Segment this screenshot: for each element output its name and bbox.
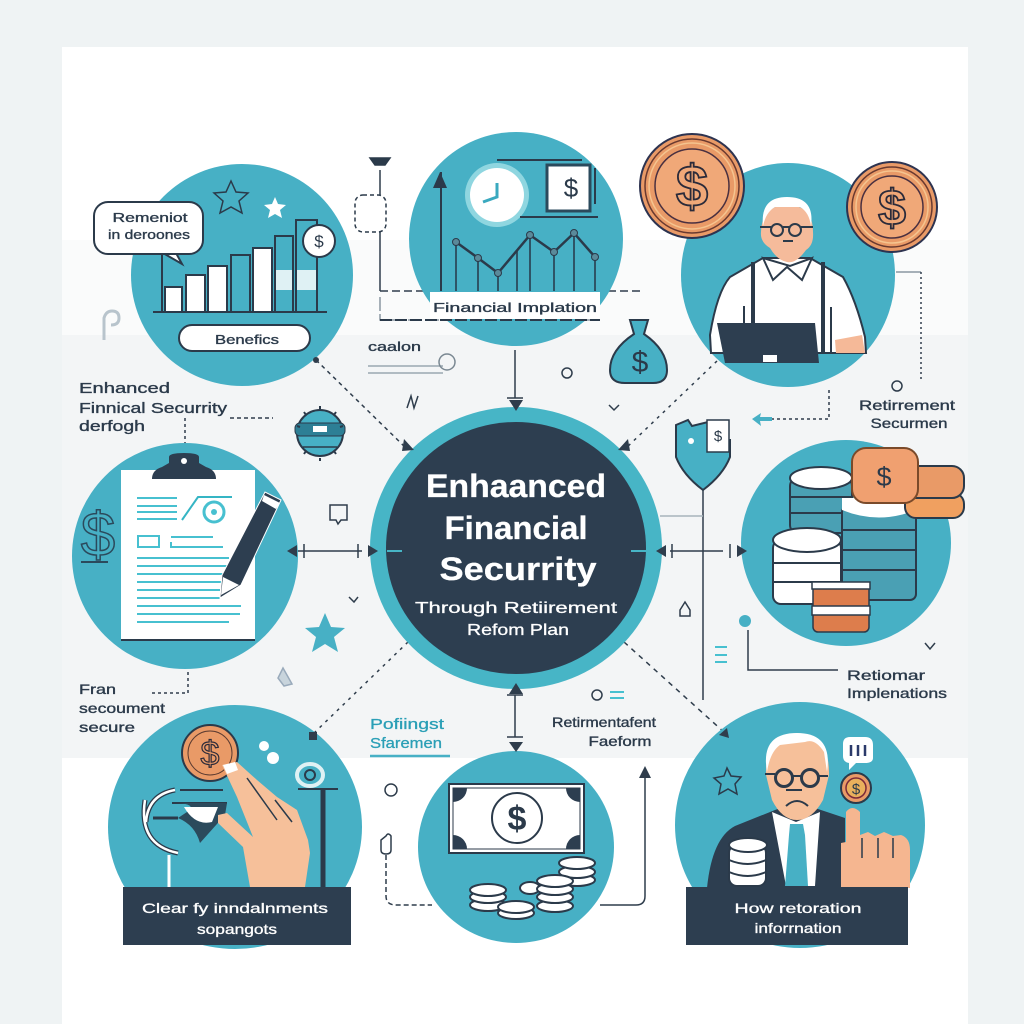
panel: benefits <box>94 164 353 386</box>
coin: $ <box>314 232 324 251</box>
speech bubble: in deroones <box>108 227 191 242</box>
label: robingst statement: Sfaremen <box>370 735 442 752</box>
label: caalon <box>368 339 455 373</box>
icon: shield: $ <box>714 428 723 445</box>
label: fran secure: Fran <box>79 681 116 697</box>
icon: large coin left: $ <box>676 154 708 219</box>
small coin <box>841 773 871 803</box>
centre stack <box>842 498 916 600</box>
icon: money bag <box>610 320 667 383</box>
label: retirement secormen <box>859 397 955 431</box>
lamp mark <box>355 158 390 232</box>
caption bar: How retoration <box>734 900 862 916</box>
icon: pin <box>739 615 751 627</box>
caption bar <box>686 887 908 945</box>
panel: coin stacks <box>741 440 964 646</box>
back stack <box>790 467 852 533</box>
icon: large coin right <box>847 162 937 252</box>
icon: globe <box>295 406 345 461</box>
caption bar <box>123 887 351 945</box>
connectors <box>150 170 921 905</box>
icon: large coin left <box>640 134 744 238</box>
icon: star <box>305 613 345 652</box>
label: enhanced financial security: Finnical Securrity <box>79 400 228 417</box>
panel: clipboard: $ <box>81 501 115 570</box>
caption bar: inforrnation <box>754 920 842 936</box>
hub subtitle: Refom Plan <box>467 622 569 639</box>
hub title: Securrity <box>440 551 597 587</box>
speech bubble <box>94 202 203 264</box>
arrowheads <box>287 357 747 778</box>
label: enhanced financial security <box>79 380 228 435</box>
orange coins <box>852 448 964 518</box>
label: enhanced financial security: derfogh <box>79 418 145 435</box>
white stack <box>773 528 841 604</box>
hub title: Financial <box>444 510 588 546</box>
caption bar: Clear fy inndalnments <box>142 900 328 916</box>
caption <box>380 292 600 320</box>
dollar frame: $ <box>564 173 579 203</box>
hub subtitle: Through Retiirement <box>415 600 618 617</box>
coin <box>303 225 335 257</box>
coin stack <box>729 838 767 886</box>
benefits pill: Benefics <box>215 332 280 347</box>
center hub <box>370 407 662 689</box>
panel: man with finger <box>675 702 925 948</box>
label: fran secure <box>79 681 165 735</box>
wallet <box>812 582 870 632</box>
coins <box>470 857 595 919</box>
label: robingst statement <box>370 716 450 756</box>
icon: teal arrow <box>752 413 772 426</box>
label: retirement secormen: Securmen <box>870 415 948 431</box>
label: retirement reform: Retirmentafent <box>552 714 656 730</box>
small coin: $ <box>852 781 861 798</box>
label: enhanced financial security: Enhanced <box>79 380 170 397</box>
label: fran secure: secoument <box>79 700 165 716</box>
label: retirement reform <box>552 714 656 749</box>
bar chart <box>153 220 327 312</box>
orange coins: $ <box>876 462 892 492</box>
speech icon <box>843 737 873 770</box>
icon: money bag: $ <box>632 346 649 379</box>
speech bubble: Remeniot <box>112 210 188 225</box>
dollar frame <box>547 165 590 211</box>
panel: banknote: $ <box>508 800 527 838</box>
hub title: Enhaanced <box>426 468 606 504</box>
panel: financial implication <box>380 132 623 346</box>
small marks <box>278 368 935 854</box>
panel: hand and coin <box>108 705 362 949</box>
hub subtitle <box>415 600 618 639</box>
label: fran secure: secure <box>79 719 135 735</box>
label: retirement secormen: Retirrement <box>859 397 955 413</box>
label: retirement reform: Faeform <box>588 733 652 749</box>
benefits pill <box>179 325 310 351</box>
label: reformar implementations: Retiomar <box>847 667 925 683</box>
caption bar: sopangots <box>197 921 277 937</box>
caption: Financial Implation <box>433 300 597 315</box>
panel: clipboard <box>72 443 298 669</box>
hand <box>841 808 910 888</box>
panel: banknote <box>418 751 614 943</box>
panel: retired man laptop <box>681 163 895 387</box>
icon: large coin right: $ <box>878 180 906 236</box>
label: reformar implementations <box>847 667 947 701</box>
panel: hand and coin: $ <box>201 735 220 773</box>
icon: flag mark <box>104 311 119 340</box>
label: reformar implementations: Implenations <box>847 685 947 701</box>
icon: shield <box>676 420 730 490</box>
label: robingst statement: Pofiingst <box>370 716 445 733</box>
hub title <box>426 468 606 587</box>
clock <box>465 163 529 227</box>
label: caalon: caalon <box>368 339 421 354</box>
